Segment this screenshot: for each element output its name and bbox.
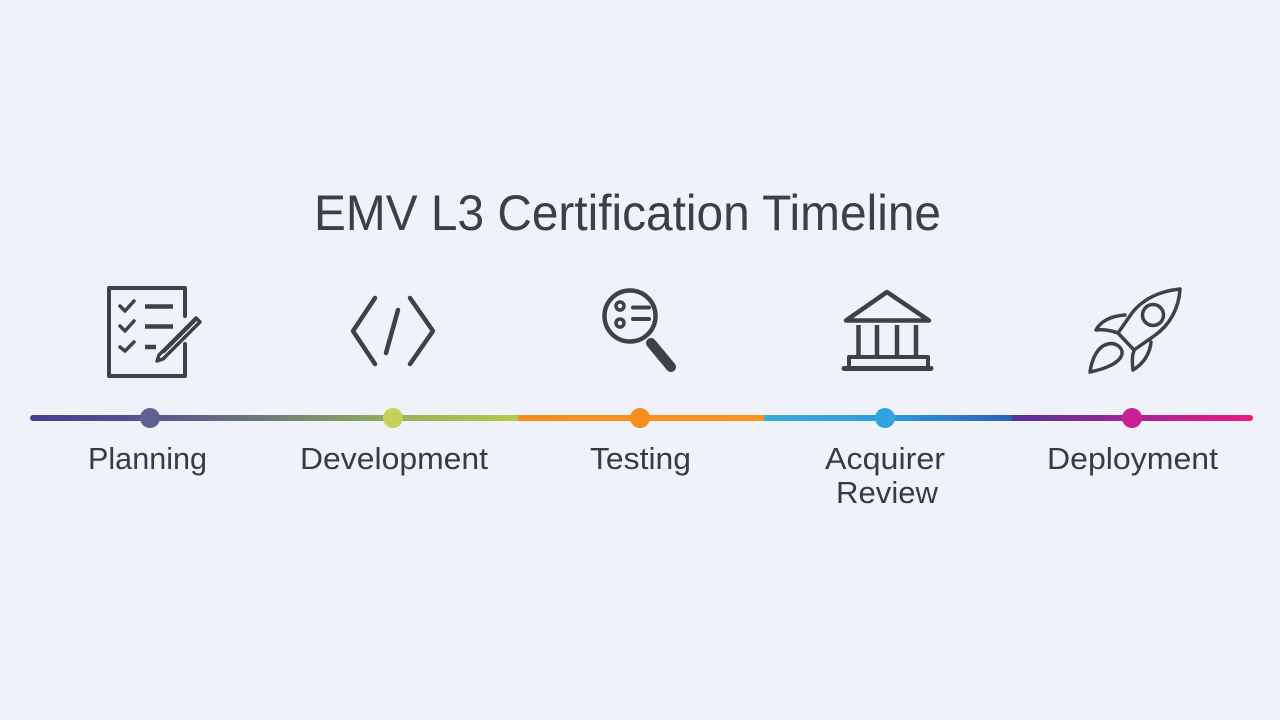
icon: code brackets (353, 298, 433, 364)
icon: bank building (844, 292, 931, 368)
icon: checklist with pencil (109, 288, 200, 376)
label: development: Development (300, 441, 488, 476)
marker: planning (140, 408, 160, 428)
label: acquirer review: Review (836, 475, 939, 510)
label: deployment: Deployment (1047, 441, 1218, 476)
marker: development (383, 408, 403, 428)
label: testing: Testing (590, 441, 691, 476)
marker: acquirer review (875, 408, 895, 428)
label: acquirer review: Acquirer (825, 441, 945, 476)
label: acquirer review (825, 441, 945, 510)
label: planning: Planning (88, 441, 207, 476)
icon: rocket (1090, 289, 1180, 372)
title: EMV L3 Certification Timeline (314, 185, 941, 241)
icon: magnifying glass (604, 290, 671, 367)
marker: testing (630, 408, 650, 428)
timeline bar (30, 415, 1253, 421)
marker: deployment (1122, 408, 1142, 428)
